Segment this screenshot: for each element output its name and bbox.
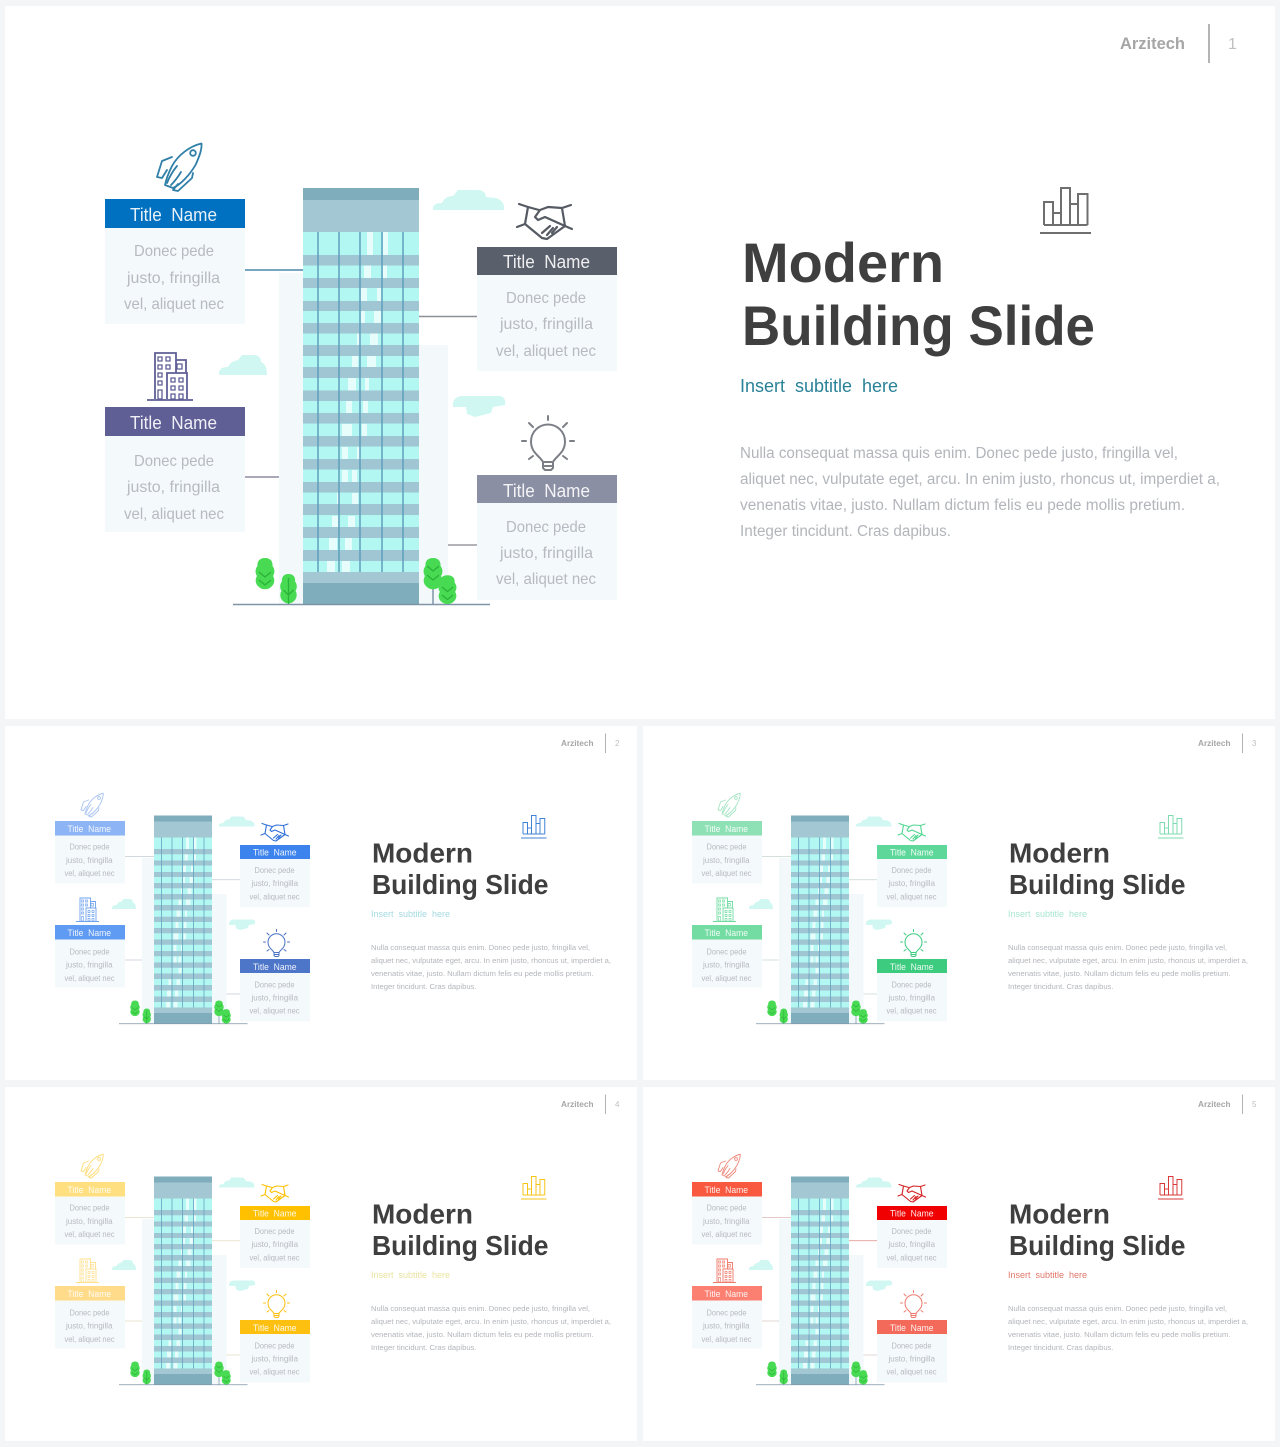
card: top left: justo, fringilla <box>126 270 220 287</box>
paragraph <box>371 943 611 991</box>
icon: bar chart <box>1158 1176 1184 1199</box>
card: top right: Donec pede <box>892 866 932 875</box>
card: bottom left: Title Name <box>704 1289 748 1299</box>
card: top left: Title Name <box>704 824 748 834</box>
paragraph: aliquet nec, vulputate eget, arcu. In enim justo, rhoncus ut, imperdiet a, <box>371 1317 611 1326</box>
card: bottom right: Title Name <box>890 962 934 972</box>
card: top left <box>692 821 762 884</box>
card: top right <box>877 845 947 907</box>
card: bottom left: vel, aliquet nec <box>124 506 224 523</box>
subtitle: Insert subtitle here <box>371 909 450 919</box>
title: Building Slide <box>372 869 548 900</box>
card: bottom left: justo, fringilla <box>126 479 220 496</box>
card: top right <box>240 845 310 907</box>
icon: rocket <box>81 793 103 817</box>
connector lines <box>245 270 477 545</box>
card: top right: vel, aliquet nec <box>886 892 936 902</box>
card: bottom left: Title Name <box>68 928 111 938</box>
card: bottom right: Donec pede <box>254 1342 295 1350</box>
paragraph: aliquet nec, vulputate eget, arcu. In enim justo, rhoncus ut, imperdiet a, <box>371 956 611 965</box>
card: top left: Title Name <box>68 1185 111 1195</box>
card: bottom right: vel, aliquet nec <box>886 1006 936 1016</box>
card: bottom left: Title Name <box>704 928 748 938</box>
card: top left: Donec pede <box>706 842 747 852</box>
card: top left <box>692 1182 762 1244</box>
title <box>1009 838 1186 900</box>
icon: light bulb <box>264 1290 290 1318</box>
card: bottom right: justo, fringilla <box>251 994 299 1002</box>
title: Modern <box>372 838 473 868</box>
card: top right: justo, fringilla <box>251 1240 299 1249</box>
panel: slide 4 yellow version <box>55 1094 620 1385</box>
card: bottom right <box>877 1320 947 1382</box>
card: top right: Title Name <box>890 1208 934 1218</box>
card: bottom left: Title Name <box>68 1289 111 1299</box>
card: bottom right: Donec pede <box>506 519 586 536</box>
card: top left: justo, fringilla <box>65 1217 113 1226</box>
paragraph: aliquet nec, vulputate eget, arcu. In enim justo, rhoncus ut, imperdiet a, <box>1008 956 1248 965</box>
card: top right: vel, aliquet nec <box>250 1254 300 1262</box>
card: top left: vel, aliquet nec <box>702 1230 752 1239</box>
header: brand and page number: 1 <box>1228 36 1237 53</box>
card: bottom left <box>105 407 245 532</box>
icon: office buildings <box>713 1259 736 1282</box>
card: bottom right: justo, fringilla <box>888 1354 936 1364</box>
card: top right: justo, fringilla <box>499 316 593 333</box>
icon: handshake <box>261 1184 288 1202</box>
right column content <box>1008 1094 1257 1352</box>
icon: handshake <box>517 204 572 239</box>
card: top left: Donec pede <box>706 1204 747 1212</box>
paragraph: venenatis vitae, justo. Nullam dictum felis eu pede mollis pretium. <box>1008 969 1230 978</box>
icon: handshake <box>261 824 288 841</box>
right column content <box>1008 734 1257 991</box>
connector lines <box>762 856 877 994</box>
icon: office buildings <box>713 898 736 922</box>
building illustration <box>112 1176 255 1385</box>
card: top left: vel, aliquet nec <box>64 869 114 878</box>
icon: light bulb <box>522 416 574 470</box>
right column content <box>371 734 620 991</box>
card: bottom right: Title Name <box>503 481 590 501</box>
card: bottom left: Donec pede <box>70 948 110 956</box>
title <box>1009 1198 1186 1261</box>
header: brand and page number: Arzitech <box>1198 1099 1230 1109</box>
card: bottom right: Title Name <box>253 1323 296 1333</box>
card: bottom left: Donec pede <box>70 1308 110 1318</box>
title: Building Slide <box>1009 869 1186 900</box>
paragraph: venenatis vitae, justo. Nullam dictum felis eu pede mollis pretium. <box>371 969 594 978</box>
header: brand and page number: 4 <box>615 1100 620 1109</box>
header: brand and page number: 2 <box>615 739 620 748</box>
card: bottom left: justo, fringilla <box>65 960 113 970</box>
paragraph <box>1008 943 1248 991</box>
building illustration <box>112 816 255 1024</box>
icon: rocket <box>718 1154 740 1178</box>
paragraph: venenatis vitae, justo. Nullam dictum felis eu pede mollis pretium. <box>1008 1330 1230 1339</box>
card: top right <box>477 247 617 371</box>
card: top left: Title Name <box>704 1185 748 1195</box>
header: brand and page number: Arzitech <box>1120 34 1185 53</box>
card: bottom left: vel, aliquet nec <box>702 1335 752 1344</box>
card: bottom right: Donec pede <box>892 1342 932 1350</box>
title: Modern <box>1009 838 1110 868</box>
icon: handshake <box>898 1184 926 1202</box>
card: bottom right: vel, aliquet nec <box>250 1006 300 1016</box>
icon: bar chart <box>521 816 546 838</box>
card: bottom left: vel, aliquet nec <box>702 974 752 983</box>
card: top right: Donec pede <box>506 290 586 307</box>
paragraph <box>740 445 1220 540</box>
subtitle: Insert subtitle here <box>740 376 898 396</box>
card: top right: justo, fringilla <box>251 879 299 888</box>
card: bottom right <box>240 959 310 1022</box>
card: top right <box>240 1206 310 1268</box>
card: bottom left: vel, aliquet nec <box>64 1335 114 1344</box>
paragraph <box>1008 1304 1248 1352</box>
card: top right: vel, aliquet nec <box>496 343 596 360</box>
title: Building Slide <box>372 1230 548 1261</box>
title: Modern <box>1009 1198 1110 1230</box>
paragraph <box>371 1304 611 1352</box>
icon: rocket <box>157 144 202 191</box>
card: top left: justo, fringilla <box>702 1217 750 1226</box>
paragraph: Integer tincidunt. Cras dapibus. <box>740 523 951 540</box>
header: brand and page number: Arzitech <box>1198 738 1230 748</box>
paragraph: Nulla consequat massa quis enim. Donec pede justo, fringilla vel, <box>371 943 590 952</box>
icon: light bulb <box>264 930 290 956</box>
icon: bar chart <box>521 1176 546 1199</box>
card: bottom left: vel, aliquet nec <box>64 974 114 983</box>
panel: slide 2 blue version <box>55 734 620 1024</box>
card: top left: vel, aliquet nec <box>702 869 752 878</box>
paragraph: Nulla consequat massa quis enim. Donec pede justo, fringilla vel, <box>1008 1304 1227 1313</box>
panel: slide 3 green version <box>692 734 1257 1024</box>
card: bottom right: justo, fringilla <box>499 545 593 562</box>
card: top left <box>55 1182 125 1244</box>
header: brand and page number: 3 <box>1252 739 1257 748</box>
card: top left <box>105 199 245 324</box>
card: bottom left: Donec pede <box>706 1308 747 1318</box>
card: top left: justo, fringilla <box>702 856 750 865</box>
card: bottom left <box>692 925 762 988</box>
card: bottom right <box>477 475 617 600</box>
paragraph: Integer tincidunt. Cras dapibus. <box>1008 1343 1114 1352</box>
panel: slide 1 large grey-blue version <box>105 24 1237 604</box>
card: top right <box>877 1206 947 1268</box>
card: top right: Donec pede <box>892 1227 932 1236</box>
header: brand and page number: 5 <box>1252 1100 1257 1109</box>
building illustration <box>749 1176 892 1385</box>
card: top right: vel, aliquet nec <box>886 1254 936 1262</box>
card: bottom right: Donec pede <box>254 980 295 990</box>
connector lines <box>762 1218 877 1355</box>
title <box>372 838 548 900</box>
card: bottom left: justo, fringilla <box>702 1322 750 1330</box>
header: brand and page number <box>1120 24 1237 63</box>
card: bottom left: justo, fringilla <box>702 960 750 970</box>
card: bottom left: Donec pede <box>706 948 747 956</box>
card: top left: Donec pede <box>70 842 110 852</box>
icon: rocket <box>718 793 740 817</box>
paragraph: venenatis vitae, justo. Nullam dictum felis eu pede mollis pretium. <box>371 1330 594 1339</box>
icon: office buildings <box>76 898 99 922</box>
card: bottom right: vel, aliquet nec <box>496 571 596 588</box>
icon: light bulb <box>900 1290 926 1318</box>
title: Building Slide <box>742 294 1095 357</box>
card: top left: justo, fringilla <box>65 856 113 865</box>
card: bottom left: justo, fringilla <box>65 1322 113 1330</box>
title: Modern <box>742 231 944 294</box>
icon: rocket <box>81 1154 103 1178</box>
card: top right: justo, fringilla <box>888 879 936 888</box>
paragraph: Integer tincidunt. Cras dapibus. <box>371 1343 476 1352</box>
paragraph: Integer tincidunt. Cras dapibus. <box>371 982 476 991</box>
card: bottom right: vel, aliquet nec <box>886 1368 936 1376</box>
icon: bar chart <box>1158 816 1184 838</box>
icon: office buildings <box>76 1259 99 1282</box>
card: bottom right: justo, fringilla <box>888 994 936 1002</box>
card: bottom right: Donec pede <box>892 980 932 990</box>
card: top left: Title Name <box>130 205 217 225</box>
card: bottom left <box>55 925 125 988</box>
card: bottom right <box>240 1320 310 1382</box>
paragraph: Nulla consequat massa quis enim. Donec pede justo, fringilla vel, <box>371 1304 590 1313</box>
card: bottom right: vel, aliquet nec <box>250 1368 300 1376</box>
card: top right: Title Name <box>253 1208 296 1218</box>
paragraph: Integer tincidunt. Cras dapibus. <box>1008 982 1114 991</box>
card: top left: Title Name <box>68 824 111 834</box>
card: top left: Donec pede <box>70 1204 110 1212</box>
title <box>742 231 1095 357</box>
header: brand and page number <box>561 1094 620 1114</box>
card: top right: vel, aliquet nec <box>250 892 300 902</box>
building illustration <box>749 816 892 1024</box>
card: bottom left <box>692 1286 762 1348</box>
subtitle: Insert subtitle here <box>1008 1270 1087 1280</box>
icon: office buildings <box>147 353 193 400</box>
paragraph: Nulla consequat massa quis enim. Donec pede justo, fringilla vel, <box>1008 943 1227 952</box>
header: brand and page number <box>1198 734 1257 753</box>
card: bottom left: Donec pede <box>134 453 214 470</box>
card: bottom left: Title Name <box>130 413 217 433</box>
connector lines <box>125 1218 240 1355</box>
paragraph: Nulla consequat massa quis enim. Donec pede justo, fringilla vel, <box>740 445 1178 462</box>
icon: light bulb <box>900 930 926 956</box>
title: Building Slide <box>1009 1230 1186 1261</box>
title: Modern <box>372 1198 473 1230</box>
card: top right: justo, fringilla <box>888 1240 936 1249</box>
card: top left: vel, aliquet nec <box>64 1230 114 1239</box>
card: top left: Donec pede <box>134 243 214 260</box>
card: top right: Donec pede <box>254 866 295 875</box>
header: brand and page number: Arzitech <box>561 1099 594 1109</box>
card: top right: Title Name <box>890 848 934 858</box>
paragraph: venenatis vitae, justo. Nullam dictum felis eu pede mollis pretium. <box>740 497 1185 514</box>
card: bottom left <box>55 1286 125 1348</box>
card: top right: Title Name <box>503 252 590 272</box>
card: bottom right <box>877 959 947 1022</box>
connector lines <box>125 856 240 994</box>
right column content <box>371 1094 620 1352</box>
title <box>372 1198 548 1261</box>
card: top left: vel, aliquet nec <box>124 296 224 313</box>
card: bottom right: Title Name <box>890 1323 934 1333</box>
card: bottom right: justo, fringilla <box>251 1354 299 1364</box>
panel: slide 5 red version <box>692 1094 1257 1385</box>
card: top right: Donec pede <box>254 1227 295 1236</box>
icon: handshake <box>898 824 926 841</box>
subtitle: Insert subtitle here <box>371 1270 450 1280</box>
header: brand and page number <box>561 734 620 753</box>
paragraph: aliquet nec, vulputate eget, arcu. In enim justo, rhoncus ut, imperdiet a, <box>1008 1317 1248 1326</box>
header: brand and page number <box>1198 1094 1257 1114</box>
header: brand and page number: Arzitech <box>561 738 594 748</box>
card: top left <box>55 821 125 884</box>
card: top right: Title Name <box>253 848 296 858</box>
icon: bar chart <box>1040 188 1091 233</box>
card: bottom right: Title Name <box>253 962 296 972</box>
paragraph: aliquet nec, vulputate eget, arcu. In enim justo, rhoncus ut, imperdiet a, <box>740 471 1220 488</box>
building illustration <box>219 188 505 604</box>
subtitle: Insert subtitle here <box>1008 909 1087 919</box>
